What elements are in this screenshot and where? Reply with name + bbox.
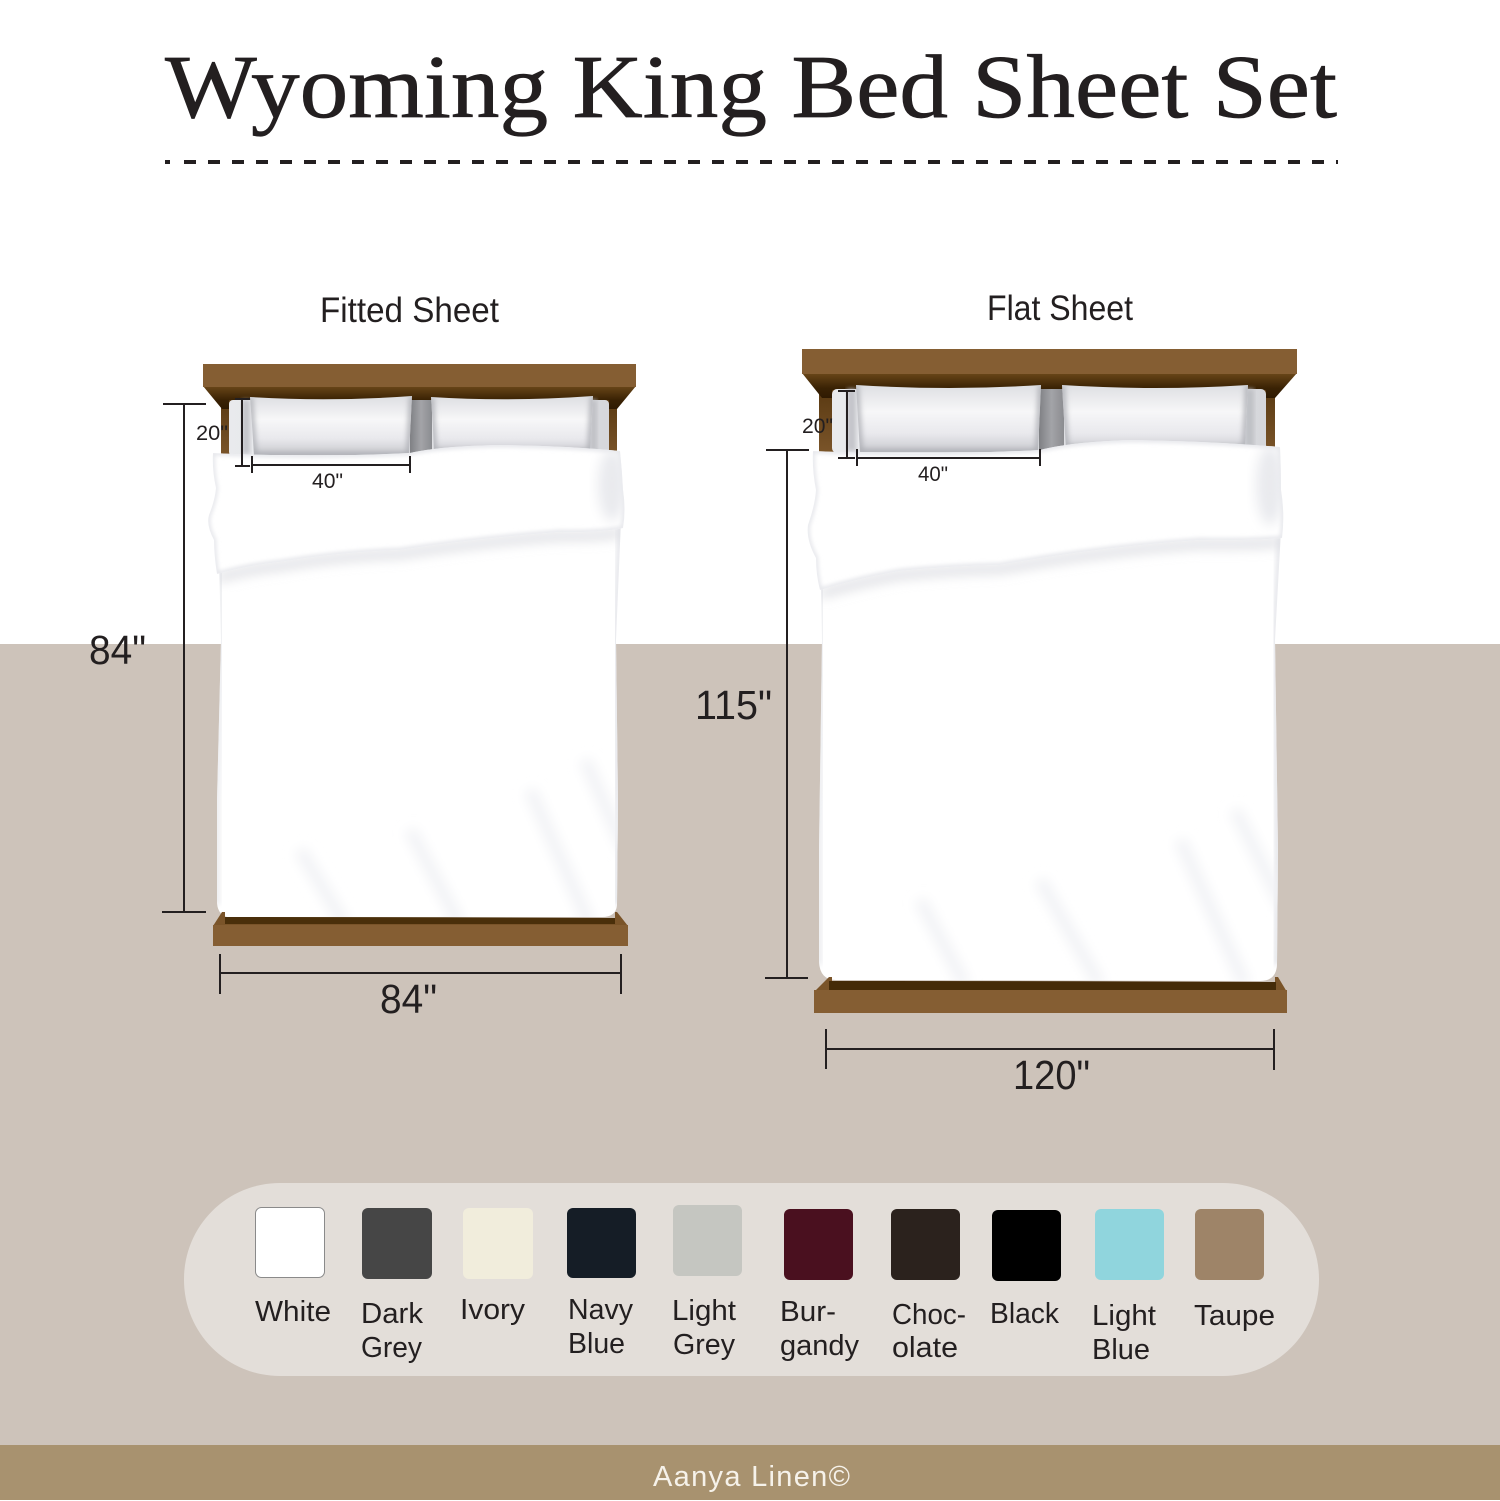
footer credit: Aanya Linen© — [653, 1461, 850, 1493]
dimension: fitted pillow width 40 — [252, 456, 410, 493]
dimension: flat height 115 — [695, 450, 809, 978]
dimension: flat width 120 — [826, 1029, 1274, 1098]
swatch: chocolate: Choc- — [892, 1299, 966, 1331]
colour palette panel — [184, 1183, 1319, 1376]
headboard — [203, 364, 636, 456]
swatch: burgundy: Bur- — [780, 1296, 836, 1328]
swatch: navy blue — [567, 1208, 636, 1360]
dimension: fitted pillow height 20: 20" — [196, 422, 228, 445]
dimension: fitted pillow height 20 — [196, 399, 250, 466]
swatch: ivory: Ivory — [460, 1294, 526, 1326]
swatch: light blue: Light — [1092, 1300, 1156, 1332]
bed: fitted sheet — [203, 364, 636, 946]
mattress and pillow gap — [832, 389, 1266, 453]
dimension: fitted width 84: 84" — [380, 976, 437, 1022]
duvet body — [217, 520, 625, 925]
swatch: dark grey: Grey — [361, 1332, 422, 1364]
swatch: dark grey — [361, 1208, 432, 1364]
title dashed rule — [165, 160, 1338, 164]
swatch: chocolate: olate — [892, 1332, 958, 1364]
swatch: black — [990, 1210, 1061, 1330]
swatch: taupe: Taupe — [1194, 1300, 1275, 1332]
swatch: light blue — [1092, 1209, 1164, 1366]
swatch: light blue: Blue — [1092, 1334, 1150, 1366]
footboard — [814, 977, 1287, 1013]
swatch: light grey — [672, 1205, 742, 1361]
dimension: flat pillow height 20: 20" — [802, 415, 833, 438]
dimension: flat height 115: 115" — [695, 682, 772, 728]
swatch: light grey: Light — [672, 1295, 736, 1327]
heading: fitted sheet: Fitted Sheet — [320, 291, 499, 330]
swatch: black: Black — [990, 1298, 1059, 1330]
swatch: burgundy — [780, 1209, 859, 1362]
dimension: flat width 120: 120" — [1013, 1052, 1090, 1098]
headboard — [802, 349, 1297, 452]
dimension: fitted pillow width 40: 40" — [312, 470, 343, 493]
bed: flat sheet — [802, 349, 1297, 1013]
swatch: navy blue: Blue — [568, 1328, 625, 1360]
swatch: chocolate — [891, 1209, 966, 1364]
swatch: white — [255, 1208, 331, 1328]
swatch: ivory — [460, 1208, 533, 1326]
pillow left — [248, 395, 414, 457]
swatch: light grey: Grey — [673, 1329, 735, 1361]
dimension: flat pillow width 40 — [857, 449, 1040, 486]
pillow right — [1062, 385, 1248, 445]
swatch: dark grey: Dark — [361, 1298, 424, 1330]
duvet fold — [208, 445, 626, 574]
dimension: fitted height 84: 84" — [89, 627, 146, 673]
dimension: flat pillow width 40: 40" — [918, 463, 948, 486]
swatch: taupe — [1194, 1209, 1275, 1332]
swatch: burgundy: gandy — [780, 1330, 859, 1362]
floor background — [0, 644, 1500, 1446]
pillow right — [431, 396, 593, 449]
mattress and pillow gap — [229, 400, 609, 456]
dimension: fitted width 84 — [220, 954, 621, 1022]
heading: flat sheet: Flat Sheet — [987, 289, 1133, 328]
dimension: fitted height 84 — [89, 404, 206, 912]
title: Wyoming King Bed Sheet Set — [165, 38, 1337, 137]
duvet body — [819, 530, 1285, 985]
dimension: flat pillow height 20 — [802, 391, 855, 458]
pillow left — [854, 383, 1044, 455]
swatch: white: White — [255, 1296, 331, 1328]
swatch: navy blue: Navy — [568, 1294, 633, 1326]
footer band — [0, 1445, 1500, 1500]
duvet fold — [808, 440, 1284, 590]
footboard — [213, 912, 628, 946]
